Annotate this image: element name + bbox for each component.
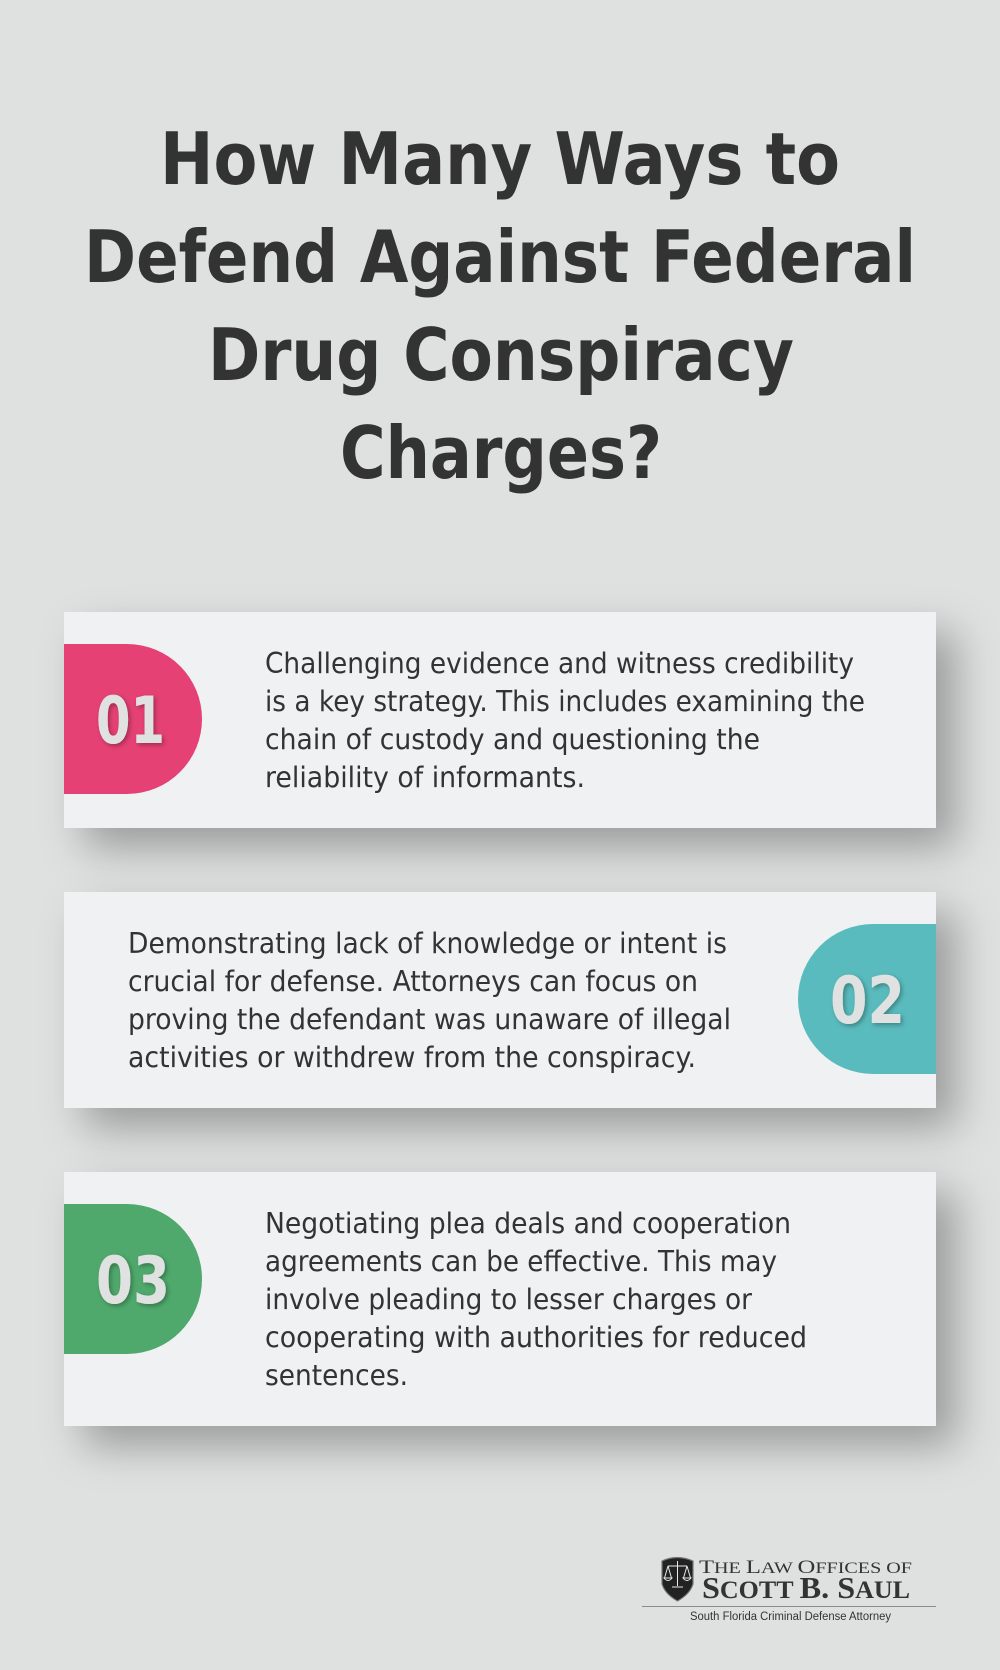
text block 02: proving the defendant was unaware of illegal bbox=[128, 1003, 731, 1036]
badge 02 bbox=[798, 924, 936, 1074]
text block 01 bbox=[265, 647, 865, 794]
badge 03: 03 bbox=[96, 1244, 170, 1319]
title: Drug Conspiracy bbox=[208, 313, 794, 397]
text block 03: involve pleading to lesser charges or bbox=[265, 1283, 752, 1316]
logo bbox=[642, 1557, 936, 1623]
text block 03: sentences. bbox=[265, 1359, 408, 1392]
panel: card 03 bbox=[64, 1172, 936, 1426]
text block 03 bbox=[265, 1207, 807, 1392]
panel: card 02 bbox=[64, 892, 936, 1108]
text block 01: chain of custody and questioning the bbox=[265, 723, 760, 756]
text block 02: activities or withdrew from the conspiracy. bbox=[128, 1041, 696, 1074]
badge 01 bbox=[64, 644, 202, 794]
panel: card 01 bbox=[64, 612, 936, 828]
text block 01: is a key strategy. This includes examining the bbox=[265, 685, 865, 718]
icon: shield with scales bbox=[662, 1558, 693, 1601]
badge 03 bbox=[64, 1204, 202, 1354]
text block 02: crucial for defense. Attorneys can focus on bbox=[128, 965, 698, 998]
title: How Many Ways to bbox=[160, 117, 840, 201]
text block 02 bbox=[128, 927, 731, 1074]
badge 02: 02 bbox=[830, 964, 905, 1039]
attorney name: SCOTT B. SAUL bbox=[702, 1570, 910, 1605]
text block 01: reliability of informants. bbox=[265, 761, 585, 794]
text block 03: Negotiating plea deals and cooperation bbox=[265, 1207, 791, 1240]
text block 03: cooperating with authorities for reduced bbox=[265, 1321, 807, 1354]
badge 01: 01 bbox=[96, 684, 165, 759]
text block 02: Demonstrating lack of knowledge or intent is bbox=[128, 927, 727, 960]
title bbox=[84, 117, 916, 495]
tagline: South Florida Criminal Defense Attorney bbox=[690, 1611, 891, 1623]
firm name: THE LAW O FFICES OF bbox=[699, 1557, 912, 1578]
text block 03: agreements can be effective. This may bbox=[265, 1245, 777, 1278]
text block 01: Challenging evidence and witness credibility bbox=[265, 647, 854, 680]
title: Charges? bbox=[340, 411, 662, 495]
